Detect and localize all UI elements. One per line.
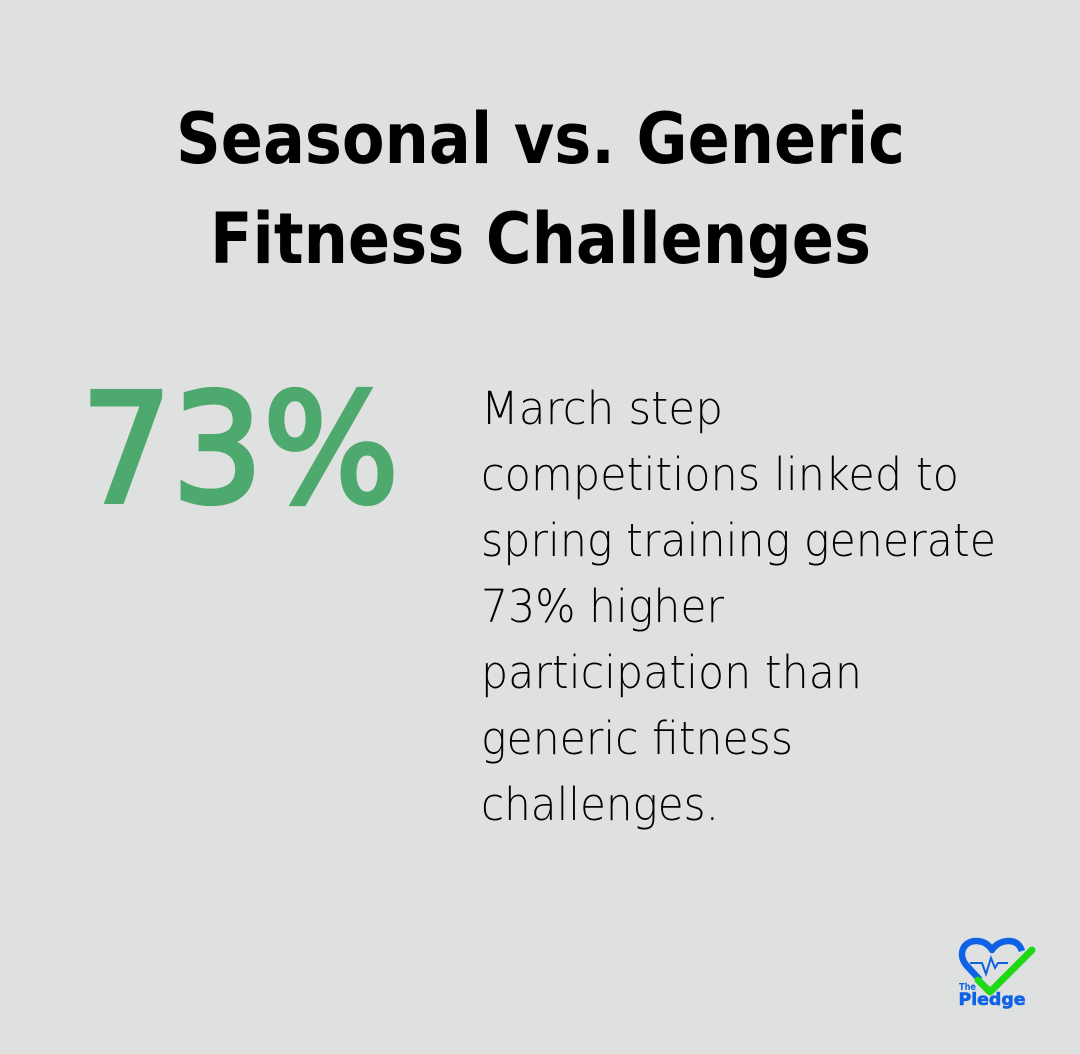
title: Fitness Challenges — [210, 198, 871, 280]
icon: green check mark — [978, 950, 1032, 992]
description text: spring training generate — [481, 514, 996, 567]
logo: The Pledge — [958, 941, 1032, 1010]
logo small word: The — [959, 982, 976, 993]
big statistic: 73%: 73% — [81, 362, 399, 538]
icon: pulse line — [970, 958, 1008, 974]
title: Seasonal vs. Generic — [176, 98, 905, 180]
description text — [481, 382, 996, 831]
icon: blue heart — [962, 941, 1022, 980]
logo main word: Pledge — [958, 990, 1026, 1010]
description text: competitions linked to — [481, 448, 959, 501]
description text: 73% higher — [481, 580, 724, 633]
description text: challenges. — [481, 778, 719, 831]
description text: generic fitness — [481, 712, 793, 765]
description text: participation than — [481, 646, 862, 699]
description text: March step — [481, 382, 723, 435]
title — [176, 98, 905, 280]
